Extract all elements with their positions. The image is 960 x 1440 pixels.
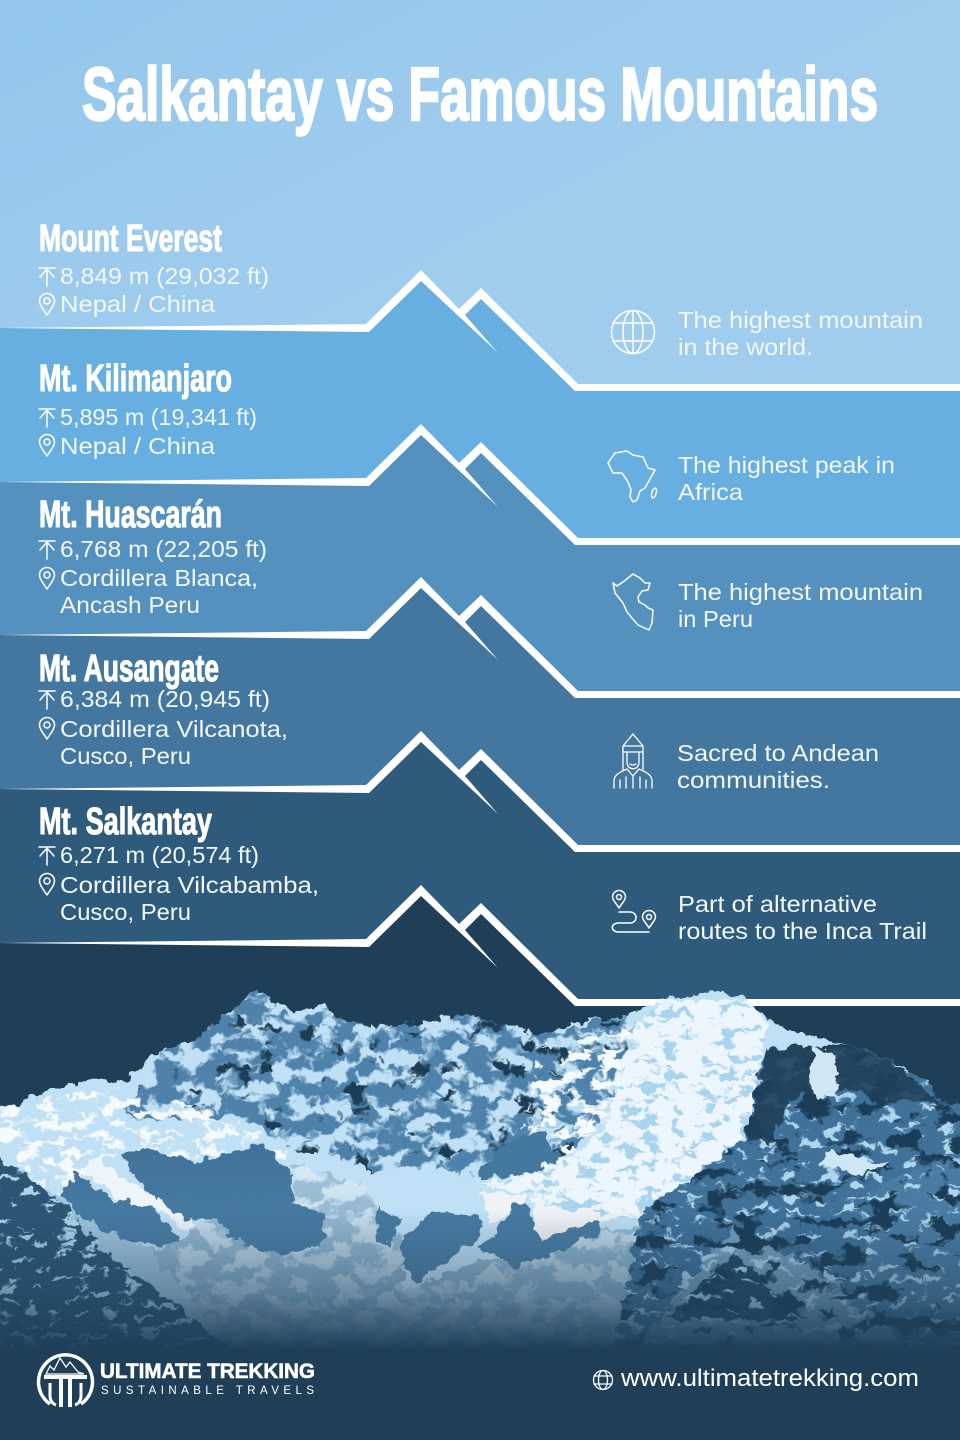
logo: Ultimate Trekking: SUSTAINABLE TRAVELS xyxy=(101,1385,314,1397)
icon: Peru map xyxy=(613,574,653,630)
note: highest in the world: in the world. xyxy=(678,334,813,360)
entry: Mt. Salkantay: Mt. Salkantay xyxy=(39,801,212,843)
icon: globe xyxy=(612,310,654,354)
note: highest in Peru xyxy=(678,579,923,632)
mountain fade into base xyxy=(0,1210,960,1440)
entry: Mt. Huascarán: Cordillera Blanca, xyxy=(60,565,258,591)
band: Mt. Salkantay layer xyxy=(0,731,960,1440)
entry: Mt. Ausangate: 6,384 m (20,945 ft) xyxy=(60,686,270,712)
entry: Mount Everest: Mount Everest xyxy=(39,218,222,260)
note: highest in Africa: Africa xyxy=(678,479,743,505)
entry: Mt. Ausangate: Cordillera Vilcanota, xyxy=(60,716,288,742)
icon: Africa map xyxy=(608,451,657,502)
entry: Mt. Huascarán: 6,768 m (22,205 ft) xyxy=(60,536,267,562)
note: Inca Trail: routes to the Inca Trail xyxy=(678,918,927,944)
note: sacred xyxy=(677,740,879,793)
entry: Mt. Huascarán xyxy=(39,494,267,618)
entry: Mt. Ausangate xyxy=(39,648,288,769)
entry: Mt. Kilimanjaro xyxy=(39,358,257,459)
entry: Mount Everest: Nepal / China xyxy=(60,291,215,317)
note: Inca Trail: Part of alternative xyxy=(678,891,877,917)
entry: Mt. Huascarán: Mt. Huascarán xyxy=(39,494,222,536)
entry: Mt. Salkantay: 6,271 m (20,574 ft) xyxy=(60,842,259,868)
entry: Mt. Ausangate: Mt. Ausangate xyxy=(39,648,219,690)
band: bottom dark layer xyxy=(0,885,960,1440)
entry: Mt. Kilimanjaro: 5,895 m (19,341 ft) xyxy=(60,404,257,430)
website url: www.ultimatetrekking.com xyxy=(620,1365,919,1392)
entry: Mt. Kilimanjaro: Nepal / China xyxy=(60,433,215,459)
entry: Mt. Huascarán: Ancash Peru xyxy=(60,592,200,618)
entry: Mount Everest: 8,849 m (29,032 ft) xyxy=(60,263,269,289)
logo: Ultimate Trekking: ULTIMATE TREKKING xyxy=(100,1360,315,1383)
entry: Mount Everest xyxy=(39,218,269,317)
note: sacred: Sacred to Andean xyxy=(677,740,879,766)
icon: route pins xyxy=(612,890,656,932)
icon: Andean woman xyxy=(614,734,652,788)
entry: Mt. Kilimanjaro: Mt. Kilimanjaro xyxy=(39,358,232,400)
entry: Mt. Salkantay: Cordillera Vilcabamba, xyxy=(60,872,319,898)
note: sacred: communities. xyxy=(677,767,830,793)
band: Mt. Ausangate layer xyxy=(0,577,960,1440)
logo: Ultimate Trekking xyxy=(39,1355,315,1407)
note: highest in the world: The highest mountain xyxy=(678,307,923,333)
note: highest in Peru: The highest mountain xyxy=(678,579,923,605)
note: highest in the world xyxy=(678,307,923,360)
entry: Mt. Salkantay: Cusco, Peru xyxy=(60,899,191,925)
icon: web globe xyxy=(594,1370,612,1390)
mountain illustration xyxy=(0,990,960,1344)
note: Inca Trail xyxy=(678,891,927,944)
band: Mt. Huascarán layer xyxy=(0,424,960,1440)
entry: Mt. Ausangate: Cusco, Peru xyxy=(60,743,191,769)
note: highest in Africa: The highest peak in xyxy=(678,452,895,478)
entry: Mt. Salkantay xyxy=(39,801,319,925)
note: highest in Peru: in Peru xyxy=(678,606,753,632)
note: highest in Africa xyxy=(678,452,895,505)
